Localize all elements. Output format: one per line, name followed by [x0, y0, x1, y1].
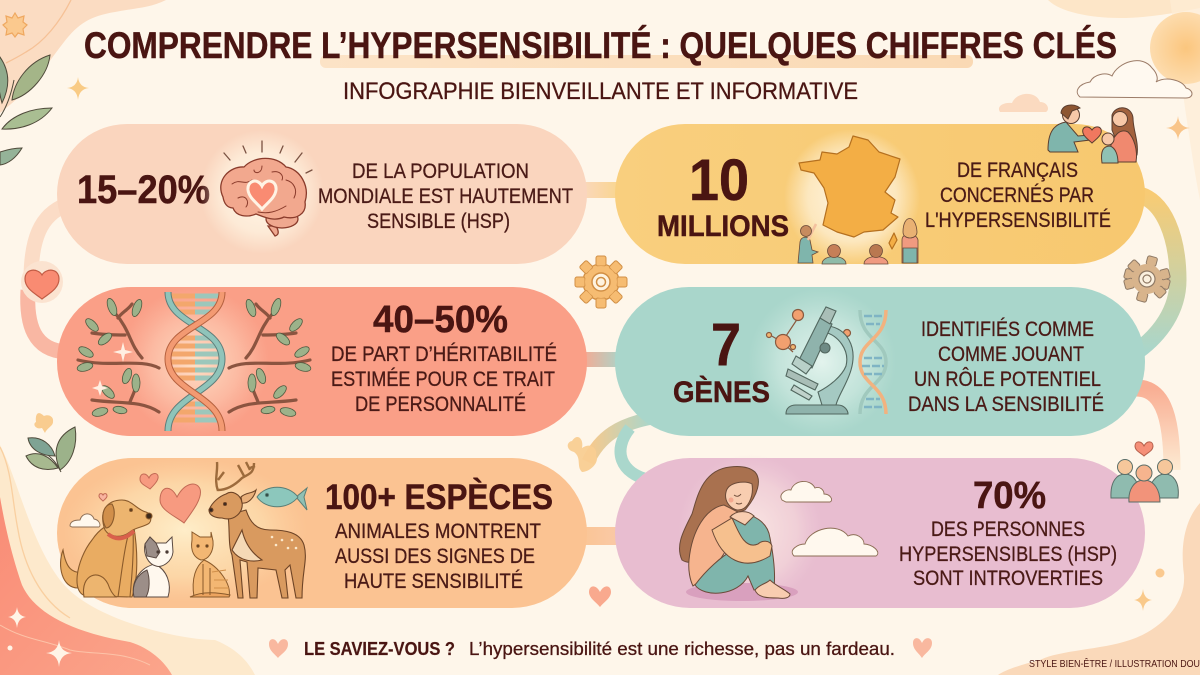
icon: hearts: [99, 474, 201, 523]
stat: 10 millions: 10: [689, 148, 749, 213]
panel: 15-20% population: [57, 124, 587, 264]
stat: 7 genes: 7: [711, 311, 741, 378]
description: MONDIALE EST HAUTEMENT: [318, 185, 573, 208]
description: HAUTE SENSIBILITÉ: [344, 570, 523, 593]
icon: sparkle right: [1166, 116, 1190, 140]
connector: panel 4 curve to panel 6: [620, 428, 650, 480]
connector: panel 1 curve to heart: [31, 205, 66, 280]
icon: grey and white cat: [133, 537, 173, 597]
panel: 40-50% heritability: [57, 287, 587, 436]
icon: heart left of callout: [269, 639, 288, 658]
stat: 10 millions: MILLIONS: [657, 210, 789, 243]
description: ESTIMÉE POUR CE TRAIT: [331, 368, 555, 391]
description: UN RÔLE POTENTIEL: [914, 368, 1101, 391]
description: [335, 520, 541, 593]
icon: sparkles bottom-left: [8, 607, 72, 667]
description: DANS LA SENSIBILITÉ: [908, 393, 1104, 416]
connector: panel 4 curve to panel 5: [588, 418, 652, 462]
description: DES PERSONNES: [931, 518, 1085, 541]
icon: deer: [209, 462, 305, 598]
callout: did you know: [269, 638, 932, 659]
icon: gear centre: [575, 256, 627, 308]
description: DE PERSONNALITÉ: [355, 393, 526, 416]
icon: orange leaves between panels: [568, 437, 597, 472]
stat: 70%: 70%: [973, 475, 1046, 517]
description: [318, 160, 573, 233]
callout: did you know: LE SAVIEZ-VOUS ?: [304, 639, 455, 659]
description: DE LA POPULATION: [352, 160, 529, 183]
description: SENSIBLE (HSP): [367, 210, 510, 233]
icon: molecule: [766, 310, 850, 352]
icon: leafy branch left: [0, 55, 52, 165]
icon: heart right of callout: [913, 638, 932, 658]
stat: 7 genes: [673, 311, 770, 409]
icon: left branches: [76, 297, 159, 418]
panel: 10 millions: [615, 105, 1145, 265]
title: [84, 25, 1117, 68]
icon: leaf sprig left: [26, 427, 76, 472]
description: L'HYPERSENSIBILITÉ: [925, 209, 1111, 232]
icon: heart left: [21, 261, 63, 303]
connector: panel 2 curve to gear and panel 4: [1135, 194, 1178, 352]
icon: small orange butterfly left: [34, 413, 53, 433]
icon: heart between bottom panels: [589, 586, 611, 607]
icon: dog: [61, 500, 152, 597]
description: ANIMALES MONTRENT: [335, 520, 541, 543]
icon: flower top-left: [3, 13, 27, 37]
icon: orange cat: [190, 532, 230, 597]
connector: panel 5 to panel 6: [580, 527, 622, 545]
icon: DNA helix: [168, 292, 222, 431]
stat: 15-20%: 15–20%: [77, 168, 210, 212]
icon: right branches: [229, 297, 312, 418]
icon: small DNA: [860, 310, 886, 414]
panel: 7 genes: [615, 287, 1145, 436]
description: DE FRANÇAIS: [957, 159, 1078, 182]
title highlight: [320, 55, 973, 68]
people around map: [798, 218, 918, 264]
decoration: top-left corner blob: [0, 0, 166, 113]
connector: panel 1 to panel 2: [580, 182, 622, 198]
icon: sparkle top-left: [67, 77, 89, 100]
connector: heart curve to panel 3: [28, 290, 66, 352]
family on top of panel: [1048, 105, 1137, 163]
icon: clouds: [781, 481, 878, 556]
icon: gear right: [1119, 251, 1175, 307]
description: [899, 518, 1117, 590]
callout: did you know: L’hypersensibilité est une richesse, pas un fardeau.: [469, 638, 895, 659]
connector: panel 4 curve to people: [1136, 388, 1172, 470]
panel: 100+ species: [57, 458, 587, 608]
decoration: bottom-left wave: [0, 445, 255, 675]
icon: fish: [257, 487, 307, 510]
decoration: bottom-right wave: [998, 503, 1200, 675]
icon: sitting woman: [679, 467, 798, 601]
description: SONT INTROVERTIES: [913, 567, 1103, 590]
icon: microscope: [786, 307, 853, 414]
icon: community group: [1111, 442, 1178, 502]
panel: 70% introverts: [615, 454, 1145, 608]
icon: brain with heart: [221, 141, 312, 236]
description: [925, 159, 1111, 232]
map of France: [799, 136, 900, 249]
description: [908, 318, 1104, 416]
stat: 10 millions: [657, 148, 789, 243]
description: [331, 343, 557, 416]
description: HYPERSENSIBLES (HSP): [899, 543, 1117, 566]
subtitle: INFOGRAPHIE BIENVEILLANTE ET INFORMATIVE: [343, 78, 858, 105]
description: CONCERNÉS PAR: [940, 184, 1094, 207]
icon: cloud small: [70, 514, 100, 527]
description: COMME JOUANT: [938, 343, 1084, 366]
description: DE PART D’HÉRITABILITÉ: [331, 343, 557, 366]
icon: cloud top-right: [1077, 61, 1192, 98]
icon: peach cloud: [999, 94, 1048, 112]
connector: panel 3 to panel 4: [580, 352, 622, 367]
description: IDENTIFIÉS COMME: [921, 318, 1094, 341]
stat: 40-50%: 40–50%: [373, 299, 508, 341]
stat: 100+ especes: 100+ ESPÈCES: [325, 477, 553, 517]
description: AUSSI DES SIGNES DE: [335, 545, 535, 568]
decoration: top-right blob, sun and right glow: [1048, 0, 1200, 200]
stat: 7 genes: GÈNES: [673, 375, 770, 409]
